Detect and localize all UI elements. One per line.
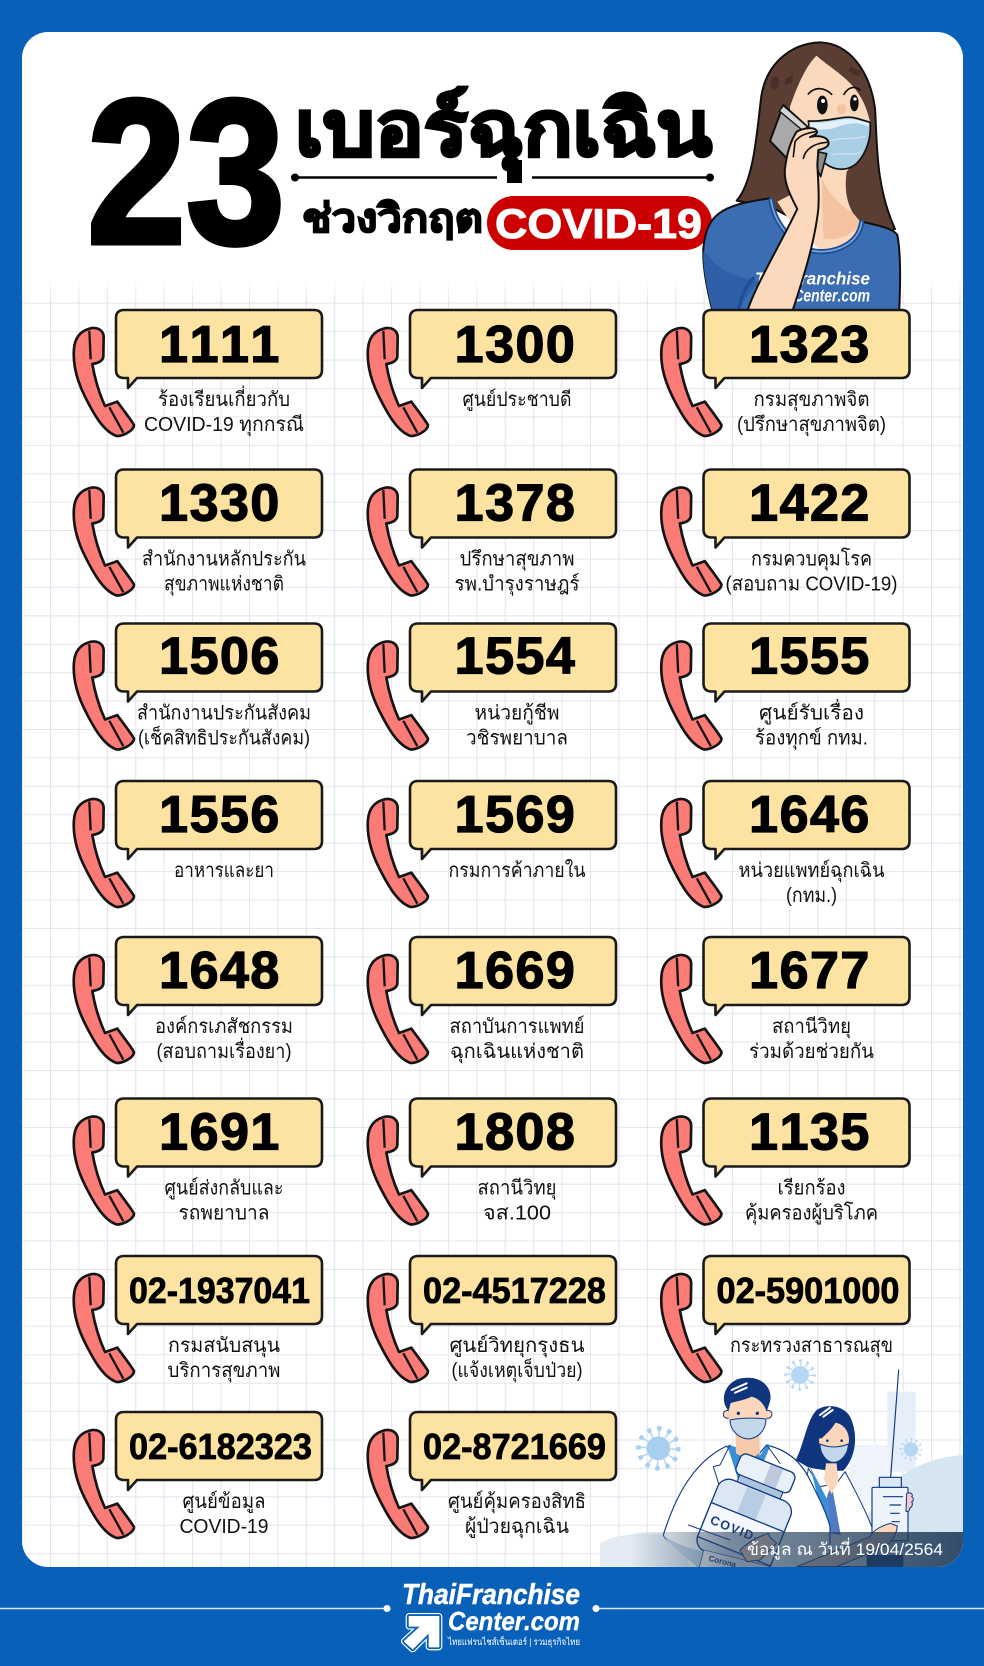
- phone icon: [74, 1116, 134, 1224]
- grid paper background: [22, 280, 963, 1567]
- entry: 02-5901000: [661, 1256, 910, 1382]
- description: บริการสุขภาพ: [168, 1360, 280, 1383]
- description: ร่วมด้วยช่วยกัน: [749, 1041, 874, 1063]
- illustration: doctors with vaccine: COVID-19: [708, 1513, 777, 1552]
- description: [142, 548, 306, 596]
- description: ศูนย์วิทยุกรุงธน: [450, 1334, 585, 1358]
- phone icon: [74, 487, 134, 595]
- number: 1300: [455, 316, 576, 374]
- description: [155, 1015, 293, 1063]
- number: 1569: [455, 786, 576, 844]
- description: [137, 702, 311, 750]
- phone icon: [74, 1430, 134, 1538]
- speech bubble: [704, 1098, 910, 1176]
- phone icon: [74, 1274, 134, 1382]
- entry: 1691: [74, 1098, 322, 1224]
- number: 1111: [159, 316, 281, 374]
- speech bubble: [410, 470, 616, 548]
- description: [737, 389, 886, 437]
- entry: 1506: [74, 624, 322, 750]
- speech bubble: [410, 781, 616, 859]
- number: 1669: [455, 942, 576, 1000]
- description: ฉุกเฉินแห่งชาติ: [450, 1041, 584, 1064]
- description: COVID-19: [180, 1516, 268, 1538]
- phone icon: [74, 328, 134, 436]
- description: [466, 702, 568, 750]
- phone icon: [368, 641, 428, 749]
- speech bubble: [704, 310, 910, 388]
- description: [448, 1490, 586, 1539]
- logo domain: Center.com: [448, 1606, 580, 1636]
- entry: 02-6182323: [74, 1412, 322, 1538]
- phone icon: [661, 1274, 721, 1382]
- description: คุ้มครองผู้บริโภค: [745, 1202, 878, 1226]
- phone icon: [661, 641, 721, 749]
- entry: 1111: [74, 310, 322, 437]
- phone icon: [368, 955, 428, 1063]
- number: 1646: [749, 786, 871, 844]
- entry: 1554: [368, 624, 616, 750]
- phone icon: [368, 487, 428, 595]
- logo tagline: ไทยแฟรนไชส์เซ็นเตอร์ | รวมธุรกิจไทย: [447, 1635, 580, 1648]
- description: (ปรึกษาสุขภาพจิต): [737, 414, 886, 437]
- number: 1135: [749, 1104, 871, 1162]
- description: กรมควบคุมโรค: [751, 548, 872, 572]
- illustration: woman on phone: Center.com: [793, 286, 870, 306]
- number: 1506: [159, 628, 281, 686]
- number: 02-6182323: [129, 1426, 312, 1467]
- description: สถาบันการแพทย์: [450, 1015, 584, 1038]
- speech bubble: [410, 1412, 616, 1490]
- number: 1648: [159, 942, 281, 1000]
- number: 1554: [455, 628, 576, 686]
- illustration: woman on phone: [703, 42, 900, 322]
- phone icon: [74, 799, 134, 907]
- description: COVID-19 ทุกกรณี: [144, 414, 304, 437]
- description: [164, 1176, 284, 1224]
- speech bubble: [116, 470, 322, 548]
- description: ศูนย์ส่งกลับและ: [164, 1176, 284, 1200]
- speech bubble: [704, 1256, 910, 1334]
- entry: 1569: [368, 781, 616, 907]
- number: 1556: [159, 786, 281, 844]
- illustration: doctors with vaccine: Corona: [708, 1554, 738, 1569]
- description: [749, 1016, 874, 1063]
- illustration: woman on phone: ThaiFranchise: [755, 268, 870, 288]
- description: ผู้ป่วยฉุกเฉิน: [465, 1516, 569, 1539]
- number: 1555: [749, 628, 871, 686]
- description: [168, 1335, 280, 1383]
- footer logo: [402, 1579, 580, 1649]
- speech bubble: [704, 937, 910, 1015]
- phone icon: [368, 328, 428, 436]
- number: 02-8721669: [423, 1426, 606, 1467]
- number: 1691: [159, 1104, 281, 1162]
- description: หน่วยแพทย์ฉุกเฉิน: [738, 859, 885, 883]
- description: วชิรพยาบาล: [466, 728, 568, 750]
- description: สำนักงานประกันสังคม: [137, 702, 311, 724]
- description: เรียกร้อง: [778, 1178, 846, 1200]
- speech bubble: [116, 937, 322, 1015]
- phone icon: [368, 1116, 428, 1224]
- description: [180, 1490, 268, 1538]
- entry: 02-4517228: [368, 1256, 616, 1383]
- speech bubble: [116, 310, 322, 388]
- description: ศูนย์คุ้มครองสิทธิ: [448, 1490, 586, 1514]
- number: 1378: [455, 474, 576, 532]
- entry: 1135: [661, 1098, 910, 1226]
- entry: 1677: [661, 937, 910, 1063]
- description: [454, 548, 580, 596]
- speech bubble: [410, 310, 616, 388]
- number: 02-1937041: [129, 1270, 310, 1311]
- description: ปรึกษาสุขภาพ: [460, 548, 574, 572]
- logo arrow icon: [405, 1617, 439, 1649]
- phone icon: [661, 328, 721, 436]
- number: 1808: [455, 1104, 576, 1162]
- description: กรมการค้าภายใน: [448, 859, 586, 882]
- subtitle: during the crisis: ช่วงวิกฤต: [302, 197, 483, 241]
- description: จส.100: [483, 1202, 551, 1224]
- description: สถานีวิทยุ: [478, 1178, 556, 1200]
- illustration: doctors with vaccine: [600, 1361, 963, 1589]
- description: ศูนย์ข้อมูล: [182, 1490, 266, 1514]
- entry: 1648: [74, 937, 322, 1063]
- description: สำนักงานหลักประกัน: [142, 548, 306, 570]
- title rule with dots: [291, 160, 714, 183]
- COVID-19 pill: COVID-19: [495, 200, 702, 247]
- phone icon: [368, 1274, 428, 1382]
- speech bubble: [410, 1098, 616, 1176]
- number: 02-5901000: [716, 1270, 900, 1311]
- speech bubble: [116, 781, 322, 859]
- description: [478, 1178, 556, 1224]
- description: องค์กรเภสัชกรรม: [155, 1015, 293, 1038]
- description: [450, 1334, 585, 1383]
- speech bubble: [410, 937, 616, 1015]
- description: (สอบถามเรื่องยา): [156, 1037, 292, 1063]
- phone icon: [661, 487, 721, 595]
- description: [450, 1015, 584, 1064]
- description: (เช็คสิทธิประกันสังคม): [138, 724, 310, 750]
- description: กระทรวงสาธารณสุข: [730, 1335, 893, 1358]
- entry: 1669: [368, 937, 616, 1064]
- description: [738, 859, 885, 907]
- phone icon: [661, 799, 721, 907]
- description: กรมสนับสนุน: [168, 1335, 280, 1358]
- description: ศูนย์ประชาบดี: [462, 388, 572, 412]
- phone icon: [74, 955, 134, 1063]
- number: 1323: [749, 316, 871, 374]
- speech bubble: [704, 624, 910, 702]
- entry: 1422: [661, 470, 910, 596]
- entry: 1555: [661, 624, 910, 750]
- speech bubble: [116, 624, 322, 702]
- entry: 1556: [74, 781, 322, 907]
- speech bubble: [704, 470, 910, 548]
- speech bubble: [116, 1098, 322, 1176]
- description: ร้องเรียนเกี่ยวกับ: [158, 385, 290, 411]
- description: หน่วยกู้ชีพ: [474, 702, 560, 726]
- description: [745, 1178, 878, 1226]
- entry: 1323: [661, 310, 910, 437]
- description: รถพยาบาล: [178, 1202, 270, 1224]
- entry: 1378: [368, 470, 616, 596]
- speech bubble: [410, 1256, 616, 1334]
- phone icon: [74, 641, 134, 749]
- number: 02-4517228: [423, 1270, 606, 1311]
- description: สุขภาพแห่งชาติ: [164, 574, 284, 596]
- entry: 02-8721669: [368, 1412, 616, 1539]
- phone icon: [368, 799, 428, 907]
- speech bubble: [116, 1412, 322, 1490]
- speech bubble: [704, 781, 910, 859]
- phone icon: [661, 1116, 721, 1224]
- description: (กทม.): [786, 885, 837, 907]
- phone icon: [661, 955, 721, 1063]
- description: ศูนย์รับเรื่อง: [759, 698, 864, 726]
- description: (แจ้งเหตุเจ็บป่วย): [452, 1357, 582, 1383]
- number: 1677: [749, 942, 871, 1000]
- date band: [630, 1532, 963, 1567]
- entry: 1330: [74, 470, 322, 596]
- description: (สอบถาม COVID-19): [726, 574, 898, 596]
- description: กรมสุขภาพจิต: [754, 389, 870, 412]
- speech bubble: [410, 624, 616, 702]
- title number 23: 23: [87, 57, 285, 287]
- description: อาหารและยา: [174, 860, 274, 882]
- description: สถานีวิทยุ: [772, 1016, 851, 1039]
- entry: 1300: [368, 310, 616, 436]
- description: [726, 548, 898, 596]
- data date note: ข้อมูล ณ วันที่ 19/04/2564: [747, 1537, 943, 1560]
- entry: 02-1937041: [74, 1256, 322, 1383]
- logo name: ThaiFranchise: [402, 1579, 580, 1611]
- description: รพ.บำรุงราษฎร์: [454, 572, 580, 596]
- entry: 1808: [368, 1098, 616, 1224]
- entry: 1646: [661, 781, 910, 907]
- description: ร้องทุกข์ กทม.: [755, 726, 868, 750]
- speech bubble: [116, 1256, 322, 1334]
- description: [755, 698, 868, 750]
- number: 1422: [749, 474, 871, 532]
- footer lines with dots: [0, 1605, 984, 1612]
- description: [144, 385, 304, 437]
- number: 1330: [159, 474, 281, 532]
- phone icon: [368, 1430, 428, 1538]
- title: emergency numbers: เบอร์ฉุกเฉิน: [295, 87, 712, 177]
